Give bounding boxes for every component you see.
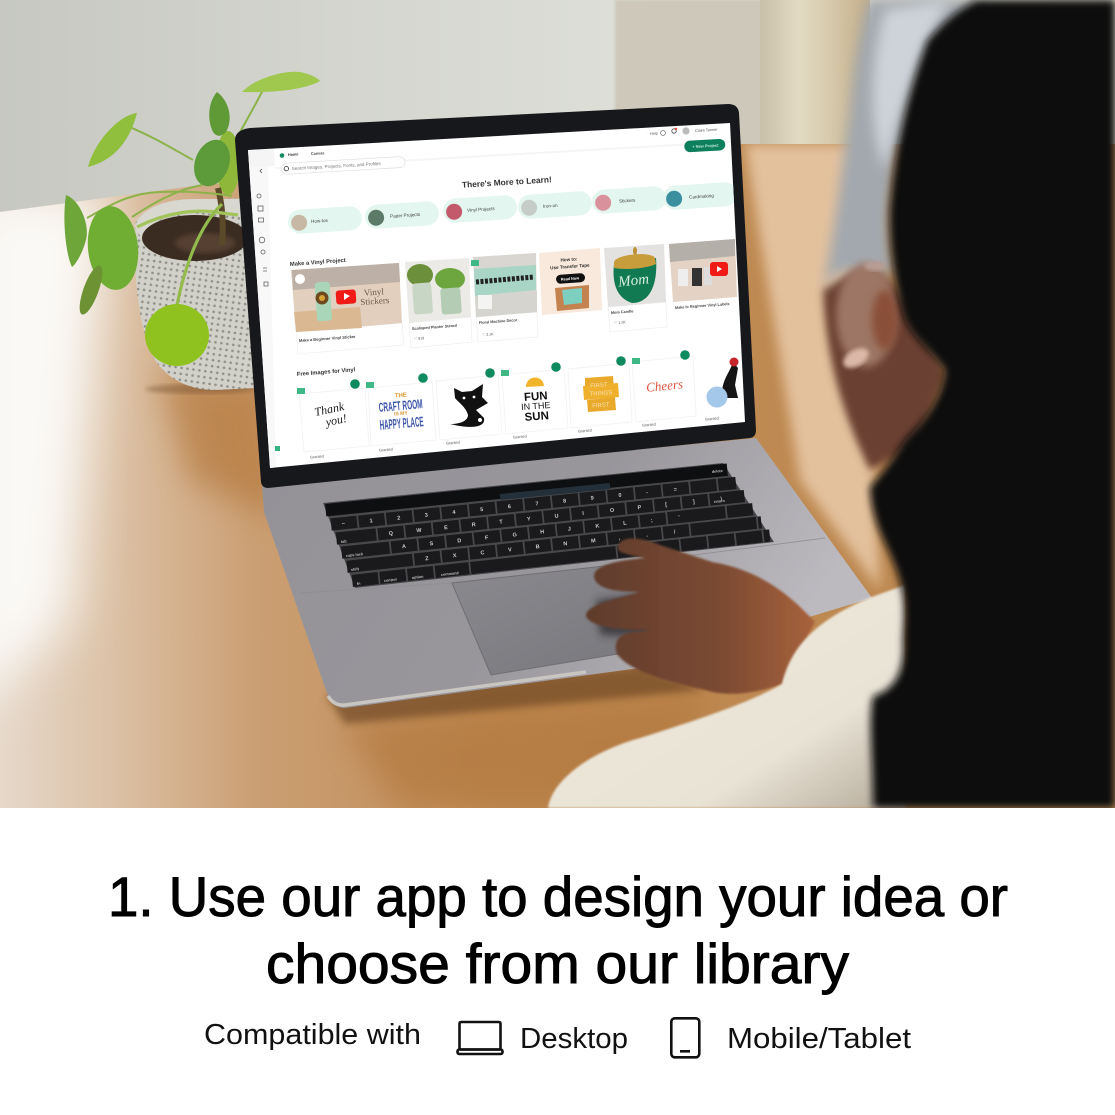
keyboard	[323, 463, 774, 588]
screen	[248, 123, 745, 468]
pill: stickers: Stickers	[619, 198, 636, 204]
new project button	[684, 139, 726, 152]
screen: HAPPY PLACE	[379, 413, 424, 433]
modifier key legends: return	[714, 499, 726, 504]
granted labels	[310, 416, 719, 460]
stems	[87, 82, 267, 305]
pill: cardmaking: Cardmaking	[689, 193, 714, 200]
card: scalloped planter stencil: Scalloped Planter Stencil	[412, 324, 457, 331]
warm wood behind pot and under laptop	[160, 370, 285, 520]
pill: iron-on: Iron-on	[543, 203, 558, 209]
card: how to use transfer tape	[539, 248, 602, 315]
stalk	[218, 188, 223, 245]
card: how to use transfer tape: How to:	[560, 256, 578, 263]
hand on trackpad	[586, 538, 815, 694]
compatibility row	[204, 1018, 911, 1057]
top bar: Canvas	[311, 151, 325, 156]
top bar: Claire Tanner	[695, 128, 718, 133]
pill: cardmaking	[664, 182, 734, 210]
pill: how-tos	[287, 206, 363, 234]
dark hair	[870, 0, 1115, 808]
video card: vinyl stickers: Make a Beginner Vinyl Sticker	[299, 334, 356, 343]
icon: phone	[671, 1018, 699, 1057]
pill: how-tos: How-tos	[311, 218, 329, 224]
granted labels: Granted	[705, 416, 719, 422]
laptop	[235, 104, 872, 708]
modifier key legends: command	[441, 571, 460, 577]
chat button	[706, 386, 728, 408]
card: how to use transfer tape: Use Transfer Tape	[550, 263, 590, 270]
key legends	[342, 487, 723, 562]
sticker: craft room: THE	[395, 392, 407, 400]
card: mom candle: Mom	[616, 271, 650, 291]
light wood on right	[745, 144, 880, 590]
lid bezel	[235, 104, 756, 488]
sticker: thank you: you!	[323, 411, 348, 429]
sticker: fun in the sun	[521, 378, 551, 424]
card: floral machine decor	[473, 253, 537, 337]
sticker: craft room	[378, 392, 424, 433]
person: hair and face	[822, 0, 1115, 808]
sticker: fun in the sun: FUN	[524, 390, 548, 404]
card: how to use transfer tape: Read Now	[561, 276, 579, 282]
wooden table	[0, 140, 1115, 808]
pill: vinyl projects	[442, 195, 518, 223]
pot	[135, 198, 256, 390]
key legends: QWERTYUIOP[]\	[389, 496, 723, 537]
card: mom candle: ♡ 1.2K	[614, 320, 626, 325]
trackpad	[452, 562, 702, 675]
pill: paper projects	[364, 201, 440, 229]
sticker: craft room: CRAFT ROOM	[378, 396, 423, 415]
sticker: thank you: Thank	[313, 399, 346, 419]
laptop shadow on table	[326, 666, 705, 724]
card: scalloped planter stencil: ♡ 919	[414, 336, 424, 341]
pot rim	[135, 199, 240, 236]
card: mom candle	[604, 244, 666, 325]
sticker: first things first	[583, 376, 619, 412]
modifier key legends: shift	[351, 567, 360, 572]
granted labels: Granted	[513, 434, 527, 440]
user menu: Help	[650, 132, 658, 136]
sticker: first things first: THINGS	[589, 390, 612, 398]
pill: paper projects: Paper Projects	[390, 212, 421, 219]
laptop base	[262, 438, 872, 708]
sidebar flag	[275, 446, 280, 451]
sidebar icons	[257, 194, 268, 286]
photo: person using laptop on a wooden table	[0, 0, 1115, 808]
leaves	[145, 304, 209, 366]
card: floral machine decor: ♡ 3.1K	[482, 332, 494, 337]
card shadows row one	[296, 302, 667, 354]
granted labels: Granted	[446, 440, 460, 446]
flags	[297, 260, 640, 394]
pill: stickers	[592, 186, 664, 214]
key legends: ASDFGHJKL;'	[402, 515, 681, 550]
heading: make a vinyl project: Make a Vinyl Project	[290, 258, 346, 268]
pill: vinyl projects: Vinyl Projects	[467, 206, 496, 213]
sticker: first things first: FIRST	[590, 382, 608, 390]
sticker: thank you	[313, 399, 348, 429]
add buttons	[350, 350, 690, 389]
wall background	[0, 0, 1115, 212]
modifier key legends: fn	[357, 582, 361, 586]
sticker: first things first: FIRST	[592, 402, 610, 410]
heading: 1. Use our app to design your idea or	[108, 865, 1008, 928]
label: mobile/tablet: Mobile/Tablet	[727, 1023, 911, 1055]
label: desktop: Desktop	[520, 1023, 628, 1055]
search box	[281, 156, 405, 174]
search box: Search Images, Projects, Fonts, and Profiles	[292, 161, 382, 171]
leaf behind pot	[218, 131, 238, 195]
heading: there's more to learn: There's More to Learn!	[462, 174, 552, 190]
modifier key legends: caps lock	[346, 552, 364, 558]
soil	[142, 215, 248, 261]
granted labels: Granted	[578, 428, 592, 434]
sticker: cheers: Cheers	[645, 376, 684, 395]
grey hair highlight	[822, 0, 985, 295]
sticker: fun in the sun: SUN	[524, 410, 549, 424]
front lip	[328, 672, 586, 705]
key legends: ZXCVBNM,./	[425, 529, 676, 562]
sticker: dog	[722, 358, 738, 398]
sticker: fox	[450, 384, 488, 427]
ear	[836, 261, 898, 372]
icon: laptop	[458, 1022, 502, 1054]
neck and jaw skin	[823, 260, 945, 470]
top bar: Home	[288, 152, 299, 157]
touch bar	[326, 470, 727, 510]
video card: vinyl labels	[669, 239, 737, 310]
image card outlines	[299, 356, 696, 452]
pill: iron-on	[517, 191, 593, 219]
key rows	[331, 483, 770, 581]
card: mom candle: Mom Candle	[611, 309, 634, 315]
modifier key legends: delete	[712, 469, 723, 474]
modifier key legends	[341, 469, 726, 586]
heading: free images for vinyl: Free Images for Vinyl	[297, 367, 356, 378]
sticker: craft room: IS MY	[394, 410, 409, 418]
card: floral machine decor: Floral Machine Decor	[479, 318, 518, 325]
granted labels: Granted	[642, 422, 656, 428]
modifier key legends: option	[412, 575, 424, 580]
sleeve	[548, 585, 905, 808]
heading: choose from our library	[266, 932, 849, 995]
sticker: fun in the sun: IN THE	[521, 400, 551, 412]
palm rest seam	[300, 538, 825, 593]
plant shadow	[145, 384, 255, 394]
video card: vinyl stickers: Vinyl	[363, 286, 385, 298]
key legends: ~1234567890-=	[342, 487, 677, 527]
top bar	[248, 127, 730, 468]
video card: vinyl stickers: Stickers	[360, 295, 390, 307]
bright window light on table	[0, 190, 110, 720]
video card: vinyl stickers	[291, 263, 402, 343]
granted labels: Granted	[310, 454, 324, 460]
hand shadow	[596, 590, 700, 640]
new project button: + New Project	[692, 143, 719, 149]
granted labels: Granted	[379, 447, 393, 453]
heading	[108, 865, 1008, 995]
card: scalloped planter stencil	[405, 258, 471, 341]
potted plant	[64, 72, 320, 394]
video card: vinyl labels: Make It: Beginner Vinyl Labels	[675, 302, 730, 310]
modifier key legends: control	[384, 578, 397, 583]
label: compatible with: Compatible with	[204, 1019, 421, 1051]
modifier key legends: tab	[341, 539, 347, 544]
